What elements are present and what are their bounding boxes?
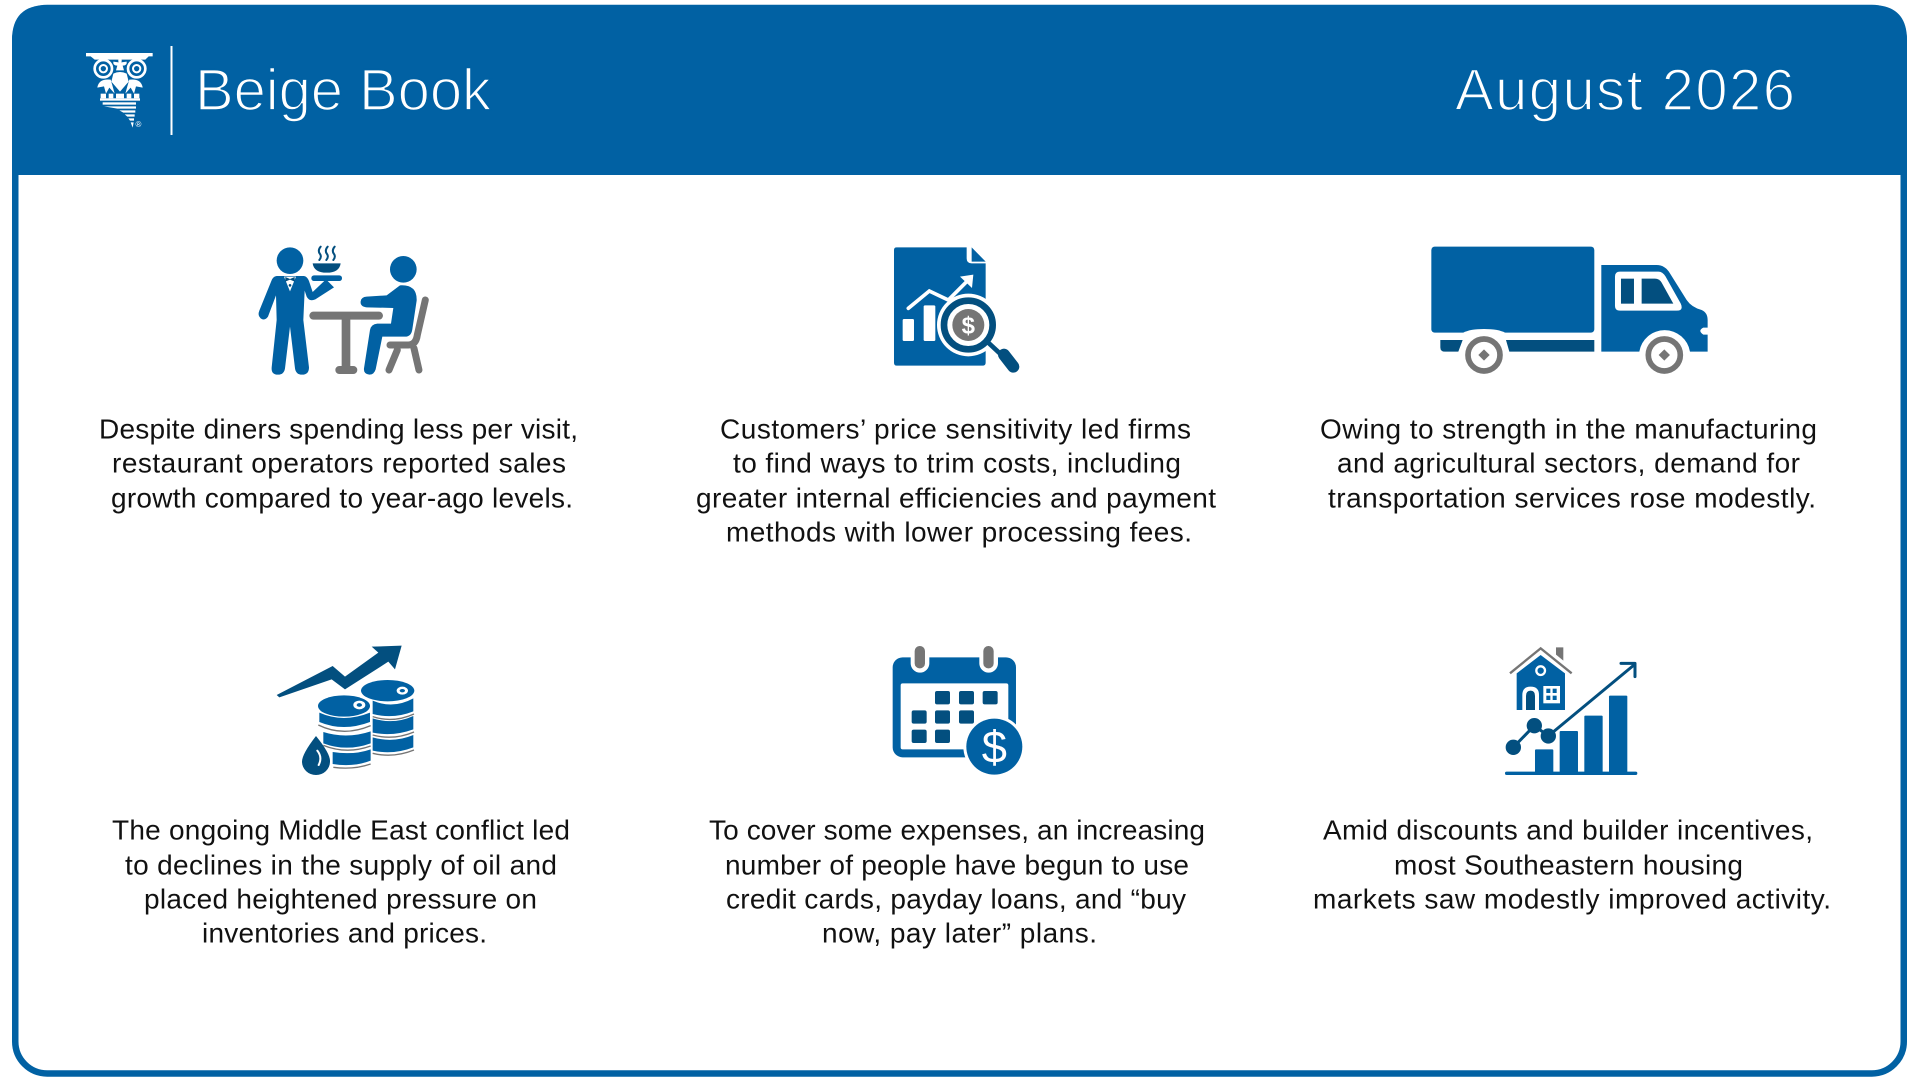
text: oil supply <box>112 814 570 948</box>
text: restaurants <box>99 414 578 514</box>
text: consumer credit: To cover some expenses, an increasing <box>709 814 1205 846</box>
text: oil supply: The ongoing Middle East conflict led <box>112 814 570 846</box>
header band <box>12 5 1907 175</box>
panel: housing <box>1313 647 1831 914</box>
title: Beige Book <box>195 58 492 123</box>
logo divider <box>170 46 172 135</box>
text: transportation <box>1320 414 1817 514</box>
text: oil supply: to declines in the supply of oil and <box>125 850 557 880</box>
logo: column capital <box>86 53 153 128</box>
text: price sensitivity: methods with lower processing fees. <box>726 516 1192 548</box>
text: housing <box>1313 814 1831 914</box>
text: transportation: transportation services rose modestly. <box>1328 482 1816 514</box>
icon: waiter and diner <box>259 247 425 375</box>
icon: calendar with dollar: $ <box>982 722 1007 773</box>
date: August 2026 <box>1455 58 1795 123</box>
panel: transportation <box>1320 247 1817 514</box>
text: housing: most Southeastern housing <box>1394 850 1743 880</box>
text: transportation: Owing to strength in the manufacturing <box>1320 414 1817 444</box>
text: oil supply: inventories and prices. <box>202 918 487 948</box>
text: price sensitivity: Customers’ price sensitivity led firms <box>720 414 1191 444</box>
text: price sensitivity: to find ways to trim costs, including <box>733 448 1181 478</box>
text: consumer credit: credit cards, payday loans, and “buy <box>726 884 1186 914</box>
text: housing: Amid discounts and builder incentives, <box>1323 814 1813 846</box>
text: oil supply: placed heightened pressure on <box>144 884 537 914</box>
text: consumer credit: number of people have begun to use <box>725 850 1189 880</box>
text: restaurants: growth compared to year-ago levels. <box>111 482 573 514</box>
text: housing: markets saw modestly improved activity. <box>1313 884 1831 914</box>
icon: oil barrels with rising arrow <box>277 646 414 775</box>
panel: restaurants <box>99 247 578 514</box>
registered mark: ® <box>136 120 142 129</box>
text: consumer credit <box>709 814 1205 948</box>
panel: consumer credit <box>709 643 1205 948</box>
text: consumer credit: now, pay later” plans. <box>822 918 1097 948</box>
text: price sensitivity: greater internal efficiencies and payment <box>696 482 1216 514</box>
icon: house with growth chart <box>1506 647 1636 773</box>
icon: calendar with dollar <box>893 643 1025 778</box>
icon: report with magnifier <box>894 247 1013 367</box>
panel: price sensitivity <box>696 247 1216 548</box>
icon: report with magnifier: $ <box>962 312 975 339</box>
icon: delivery truck <box>1431 247 1708 377</box>
text: restaurants: restaurant operators reported sales <box>112 448 566 478</box>
text: price sensitivity <box>696 414 1216 548</box>
text: transportation: and agricultural sectors, demand for <box>1337 448 1800 478</box>
panel: oil supply <box>112 646 570 948</box>
text: restaurants: Despite diners spending less per visit, <box>99 414 578 444</box>
